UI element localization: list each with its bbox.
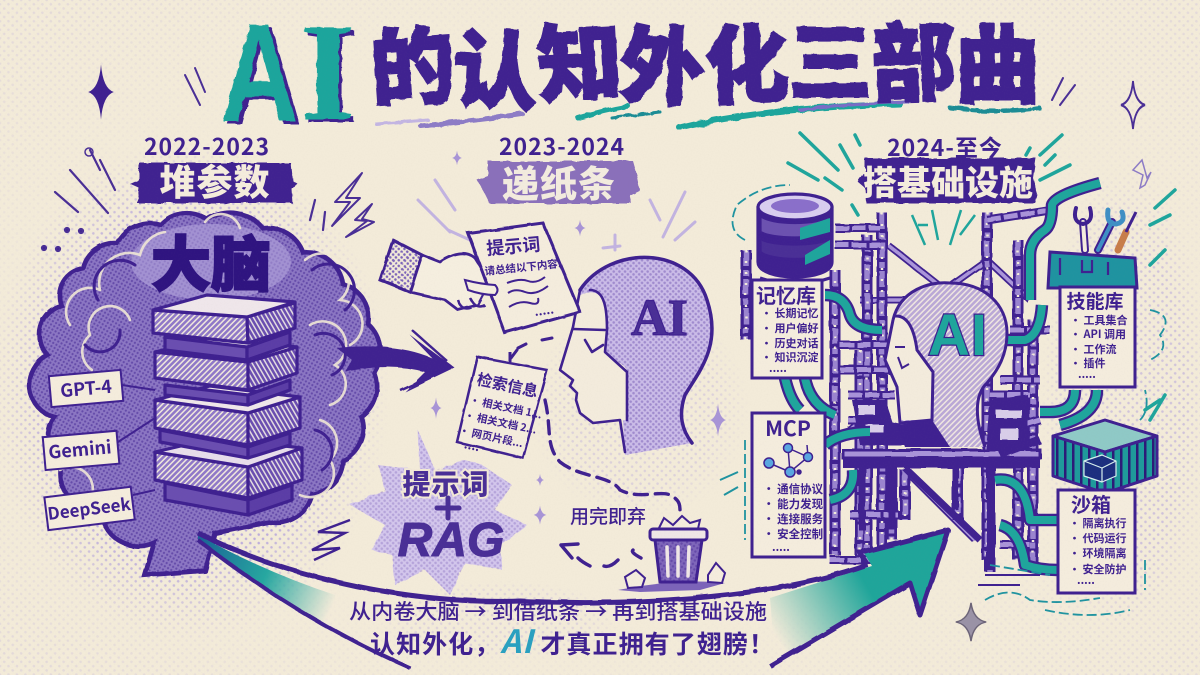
panel: sandbox: • 环境隔离	[1069, 545, 1126, 561]
brain	[29, 213, 381, 575]
retrieval note: • 相关文档 1...	[468, 392, 543, 422]
panel: MCP: • 能力发现	[763, 496, 824, 512]
dashed arrow out of trash	[561, 544, 641, 566]
leader lines from tags	[118, 385, 155, 495]
dark scaffold mass	[852, 395, 1028, 455]
brain folds	[60, 214, 362, 500]
phase 1 banner	[130, 154, 298, 206]
panel: sandbox	[1058, 489, 1135, 593]
arrow caption line 2: 认知外化，AI 才真正拥有了翅膀！	[370, 617, 774, 663]
icon: network	[764, 444, 812, 477]
sparkle right of title	[1121, 81, 1145, 129]
retrieval note: • 相关文档 2...	[463, 408, 538, 438]
phase 2 date: 2023-2024	[499, 128, 625, 162]
thin book 3	[160, 430, 290, 458]
panel: memory store	[752, 280, 822, 378]
arrow caption line 1: 从内卷大脑 → 到借纸条 → 再到搭基础设施	[349, 596, 767, 626]
title text: 部	[870, 16, 958, 114]
tag: GPT-4	[49, 370, 123, 407]
scaffolding	[746, 210, 1050, 572]
prompt paper: 请总结以下内容:	[484, 256, 562, 279]
title text: 化	[703, 18, 791, 116]
panel: skills store	[1060, 287, 1135, 387]
panel: memory store: • 用户偏好	[761, 320, 818, 336]
sparkle outline	[1133, 160, 1151, 188]
panel: MCP	[752, 413, 825, 557]
sketch lines around banner	[42, 148, 325, 251]
arrow: brain to note	[337, 330, 455, 392]
panel: memory store: • 知识沉淀	[761, 349, 818, 365]
prompt paper: 提示词	[485, 230, 541, 261]
arrow tail	[198, 535, 340, 635]
title text: 知	[535, 16, 625, 115]
teal pipes	[785, 183, 1100, 570]
thin book 2	[165, 380, 290, 405]
book 1	[153, 295, 295, 343]
accent strokes beside title	[185, 68, 1075, 105]
phase 2 banner	[477, 154, 640, 208]
icon: toolbox with tools	[1048, 208, 1137, 288]
title text	[367, 16, 1040, 122]
panel: skills store: 技能库	[1066, 287, 1124, 314]
prompt paper	[465, 223, 580, 333]
panel: memory store: • 历史对话	[761, 335, 818, 351]
icon: lightning bolts	[332, 173, 374, 237]
burst: prompt + RAG	[350, 430, 527, 595]
panel: MCP: • 通信协议	[763, 481, 824, 497]
phase 1 date: 2022-2023	[144, 128, 270, 162]
teal bolts above head	[912, 210, 975, 245]
panel: sandbox: .....	[1077, 572, 1095, 588]
tag: GPT-4: GPT-4	[59, 373, 113, 403]
prompt paper: .....	[533, 300, 555, 320]
title accent: AI: I	[303, 0, 359, 153]
scaffold platform	[843, 440, 1040, 570]
phase 3 banner: 搭基础设施	[863, 156, 1033, 205]
panel: MCP: • 连接服务	[763, 511, 824, 527]
small burst left of arrow	[720, 472, 738, 495]
book 4	[155, 438, 302, 498]
panel: MCP: • 安全控制	[763, 526, 823, 542]
retrieval note: ....	[463, 435, 482, 455]
small sparkles	[430, 151, 726, 525]
tag: Gemini	[43, 431, 119, 470]
book 2	[155, 338, 297, 390]
tag: Gemini: Gemini	[47, 433, 113, 465]
AI head in profile	[560, 257, 712, 455]
icon: database	[758, 194, 832, 284]
phase 3: infrastructure section	[720, 129, 1175, 641]
brain label: 大脑	[151, 217, 271, 304]
burst: prompt + RAG: 提示词	[402, 463, 490, 503]
book stack	[153, 295, 302, 515]
sparkle left of title	[88, 64, 114, 120]
zigzag marks	[312, 520, 350, 560]
title text: 三	[788, 17, 873, 112]
thin book 1	[165, 332, 290, 360]
panel: skills store: • 工作流	[1070, 341, 1116, 357]
retrieval note	[455, 352, 549, 466]
panel: memory store: .....	[769, 360, 787, 376]
arrow outline	[198, 530, 948, 668]
phase 1: brain section	[29, 128, 381, 575]
head label: AI: AI	[928, 303, 988, 368]
dashed line: head to note	[511, 338, 552, 358]
splash and swirl marks	[732, 185, 1166, 615]
label: discard: 用完即弃	[570, 502, 646, 529]
title text: 曲	[955, 20, 1040, 115]
title accent: AI: A	[224, 0, 302, 154]
icon: hand with paper	[380, 240, 490, 310]
book 3	[155, 386, 300, 445]
teal burst around heading	[788, 133, 1175, 420]
panel: sandbox: • 隔离执行	[1069, 515, 1126, 531]
icon: sandbox container	[1053, 420, 1157, 493]
burst: prompt + RAG: RAG	[398, 514, 504, 567]
panel: sandbox: 沙箱	[1071, 489, 1111, 518]
panel: sandbox: • 代码运行	[1069, 530, 1126, 546]
panel: skills store: • 工具集合	[1070, 312, 1128, 328]
title text: 外	[618, 20, 706, 118]
panel: MCP: .....	[772, 539, 790, 555]
title text: 认	[450, 23, 540, 122]
ground lines	[978, 575, 1040, 585]
screwdriver	[1118, 232, 1126, 250]
phase 3 date: 2024-至今	[887, 129, 1003, 163]
sparkle bottom right	[956, 603, 986, 641]
panel: skills store: • API 调用	[1070, 326, 1126, 342]
phase 2: prompt section	[350, 128, 726, 595]
panel: memory store: 记忆库	[756, 280, 816, 309]
head label: AI: AI	[631, 290, 687, 347]
title text: 的	[367, 19, 459, 120]
phase 1 banner: 堆参数	[159, 154, 271, 206]
icon: trash can	[618, 516, 725, 592]
sweeping arrow	[198, 530, 948, 668]
retrieval note: • 网页片段...	[458, 423, 524, 451]
tag: DeepSeek: DeepSeek	[46, 490, 133, 525]
teal brush strokes under title	[376, 102, 1040, 128]
dashed line: note to trash	[545, 400, 680, 512]
panel: sandbox: • 安全防护	[1069, 561, 1126, 577]
phase 2 banner: 递纸条	[502, 154, 616, 208]
spanner	[1098, 210, 1123, 250]
arrow head body	[770, 530, 948, 662]
wrench	[1075, 208, 1091, 250]
burst lines	[418, 180, 695, 250]
panel: skills store: • 插件	[1070, 355, 1106, 371]
panel: memory store: • 长期记忆	[761, 305, 818, 321]
panel: MCP: MCP	[765, 413, 811, 443]
thin book 4	[165, 483, 292, 515]
title: AI 的认知外化三部曲	[220, 0, 1040, 154]
AI head on scaffold	[885, 283, 1007, 447]
panel: skills store: .....	[1078, 366, 1096, 382]
retrieval note: 检索信息	[475, 368, 540, 402]
